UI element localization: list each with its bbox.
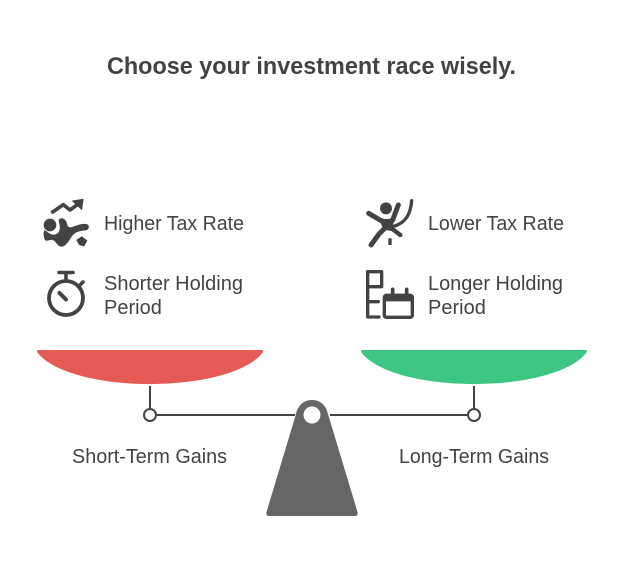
- icon: stopwatch: [49, 272, 83, 315]
- label: lower tax rate: Lower Tax Rate: [428, 213, 564, 235]
- pan connector right: [330, 386, 480, 421]
- label: shorter holding period: Period: [104, 297, 162, 319]
- label: longer holding period: Period: [428, 297, 486, 319]
- label: higher tax rate: Higher Tax Rate: [104, 213, 244, 235]
- panel: long-term side: [330, 201, 587, 468]
- panel: short-term side: [37, 199, 295, 468]
- fulcrum: [266, 400, 358, 516]
- icon: chart and calendar: [368, 272, 412, 317]
- pan connector left: [144, 386, 295, 421]
- icon: climbing figure: [369, 201, 412, 245]
- pan: red: [37, 350, 263, 384]
- title: Choose your investment race wisely.: [107, 53, 516, 80]
- label: short-term gains: Short-Term Gains: [72, 446, 227, 468]
- icon: rising arrow and falling figure: [44, 199, 89, 247]
- label: shorter holding period: Shorter Holding: [104, 273, 243, 295]
- label: long-term gains: Long-Term Gains: [399, 446, 549, 468]
- label: longer holding period: Longer Holding: [428, 273, 563, 295]
- pan: green: [361, 350, 587, 384]
